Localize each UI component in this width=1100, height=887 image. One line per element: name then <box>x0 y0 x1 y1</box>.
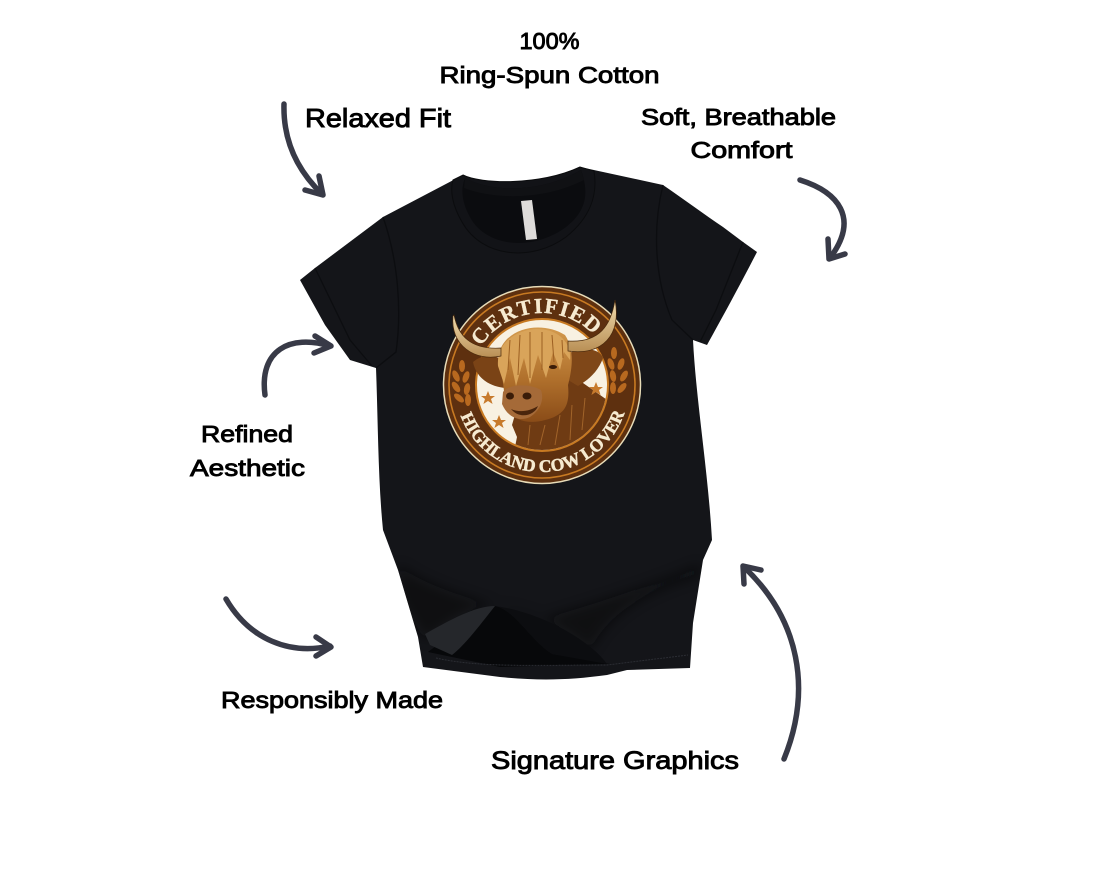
neck label <box>521 200 537 240</box>
label: 100% ring-spun cotton <box>440 28 660 88</box>
arrow: soft, breathable comfort <box>800 180 845 259</box>
label: refined aesthetic <box>190 421 305 481</box>
wheat sprig: right <box>606 347 630 395</box>
shirt body <box>300 167 757 679</box>
stars <box>481 382 603 428</box>
infographic canvas <box>189 32 848 774</box>
face <box>500 327 572 422</box>
badge rings <box>444 286 640 484</box>
hem folds <box>398 565 700 667</box>
badge text: highland cow lover: HIGHLAND COW LOVER <box>460 410 625 472</box>
label: soft, breathable comfort <box>641 104 836 163</box>
label: signature graphics: Signature Graphics <box>491 747 739 775</box>
arrow: signature graphics <box>743 566 799 759</box>
label: relaxed fit: Relaxed Fit <box>305 103 452 133</box>
label: soft, breathable comfort: Comfort <box>690 137 793 163</box>
sleeve seams <box>315 185 743 368</box>
arrow: responsibly made <box>226 599 331 656</box>
label: refined aesthetic: Aesthetic <box>190 455 305 481</box>
label: refined aesthetic: Refined <box>201 421 293 447</box>
t-shirt <box>300 167 757 679</box>
badge text: certified: CERTIFIED <box>472 298 600 344</box>
arrow: refined aesthetic <box>264 336 331 395</box>
label: 100% ring-spun cotton: 100% <box>520 28 580 54</box>
arrow: relaxed fit <box>284 104 323 195</box>
badge: certified highland cow lover <box>442 286 642 484</box>
label: responsibly made: Responsibly Made <box>221 687 443 713</box>
right horn <box>568 300 616 352</box>
label: 100% ring-spun cotton: Ring-Spun Cotton <box>440 62 660 88</box>
collar <box>452 167 595 253</box>
wheat sprig: left <box>450 360 471 406</box>
highland cow head <box>473 327 610 452</box>
left horn <box>453 315 501 357</box>
cow ears <box>473 356 506 388</box>
label: soft, breathable comfort: Soft, Breathable <box>641 104 836 130</box>
muzzle <box>502 385 542 419</box>
forelock <box>498 329 570 386</box>
